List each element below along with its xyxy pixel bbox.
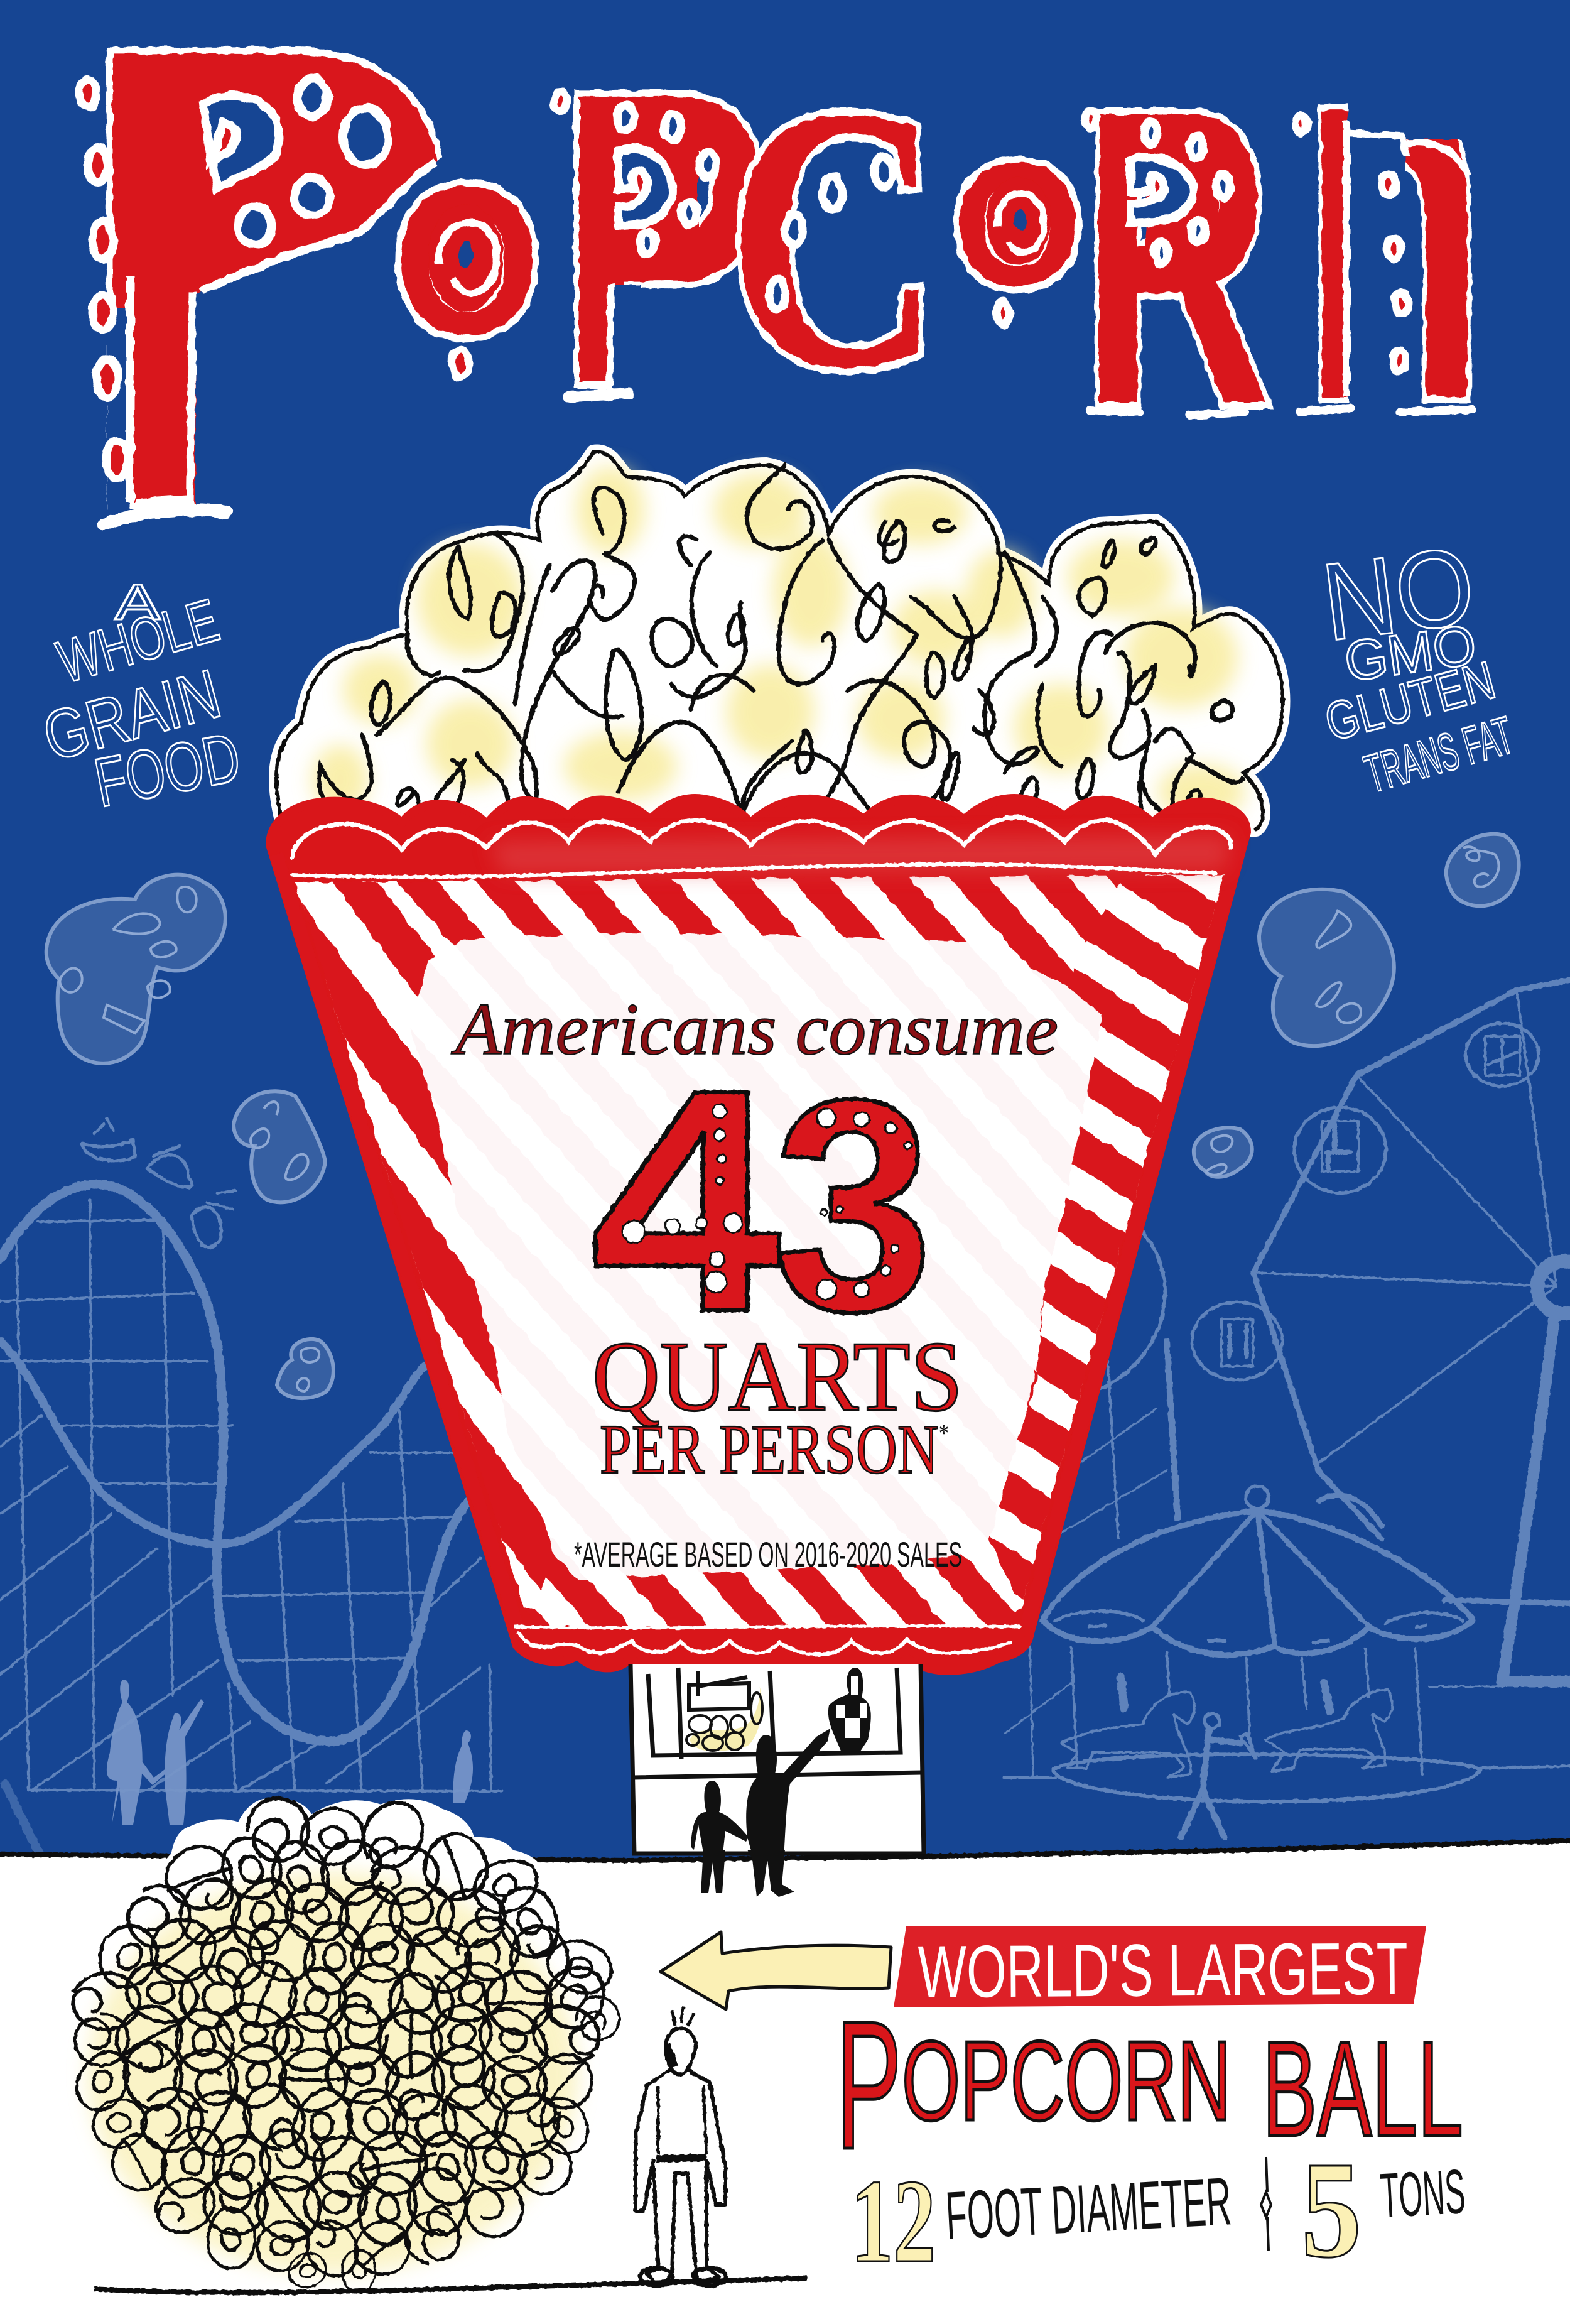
bucket number: 43: 4 (590, 1024, 783, 1378)
text block: no GMO gluten trans fat: GLUTEN (1319, 650, 1502, 752)
text block: a whole grain food: GRAIN (35, 655, 229, 776)
bucket body (270, 798, 1247, 1673)
text block: no GMO gluten trans fat: NO (1316, 524, 1481, 665)
child customer silhouette (691, 1781, 749, 1893)
popcorn silhouette (276, 452, 1282, 829)
background: ghost popcorn kernels (46, 834, 1519, 1398)
letter C: C (727, 28, 941, 446)
bucket text: per person: PER PERSON (600, 1411, 1016, 1489)
red side edges over the stripes (276, 842, 1240, 1639)
stat: 12 foot diameter (851, 2156, 1233, 2288)
ball ink loops (65, 1790, 624, 2294)
stat: 12 foot diameter: 12 (851, 2156, 936, 2288)
heading: popcorn ball: OPCORN (902, 2018, 1232, 2144)
booth counter and window (633, 1668, 922, 1778)
title dots and rivets (79, 79, 1473, 524)
top band wash (490, 835, 1231, 873)
stat: 5 tons (1301, 2133, 1467, 2286)
background: ferris wheel (1192, 980, 1570, 1686)
background: carousel (1005, 1486, 1570, 1837)
bucket text: per person: * (939, 1419, 949, 1447)
popcorn heap (276, 452, 1282, 829)
striped side panel (295, 874, 1225, 1627)
ball yellow body (88, 1872, 578, 2274)
text block: no GMO gluten trans fat: GMO (1341, 614, 1480, 694)
bucket rim lines (292, 817, 1231, 1654)
bucket number: 43 (590, 1024, 933, 1378)
background: roller coaster (0, 1118, 1178, 1852)
bucket footnote: *AVERAGE BASED ON 2016-2020 SALES (574, 1534, 962, 1574)
heading: popcorn ball: P (836, 1984, 902, 2187)
adult customer silhouette (746, 1729, 830, 1897)
rivets on the number (622, 1104, 912, 1300)
heading: popcorn ball (836, 1984, 1463, 2187)
bucket text: Americans consume: Americans consume (451, 988, 1058, 1070)
letter P second: P (558, 7, 771, 470)
bucket number: 43: 3 (774, 1037, 933, 1374)
popcorn bucket (270, 798, 1247, 1673)
divider between stats (1261, 2157, 1271, 2251)
bucket text: quarts: QUARTS (592, 1320, 963, 1432)
booth figures legs over the ground (701, 1850, 794, 1897)
background: ghost kernel curls (60, 847, 1499, 1391)
text block: a whole grain food: FOOD (89, 719, 246, 822)
text block: a whole grain food: A (115, 574, 161, 630)
ground line (0, 1840, 1570, 2324)
vendor (828, 1668, 871, 1752)
letter R: R (1081, 24, 1272, 491)
text block: a whole grain food: WHOLE (50, 587, 226, 696)
title: POPCORN (74, 0, 1486, 641)
text block: no GMO gluten trans fat (1316, 524, 1520, 803)
letter O: O (394, 143, 541, 377)
booth wall (631, 1664, 924, 1854)
arrow pointing at the ball (661, 1932, 891, 2009)
letter O second: O (953, 128, 1082, 322)
stat: 12 foot diameter: FOOT DIAMETER (944, 2163, 1233, 2254)
world's largest popcorn ball (65, 1790, 624, 2294)
popcorn ink loops (276, 452, 1282, 829)
text block: a whole grain food (35, 574, 246, 822)
poster: TONS (1378, 2156, 1467, 2231)
popcorn machine (686, 1671, 762, 1751)
stat: 5 tons: 5 (1301, 2133, 1362, 2286)
standing man for scale (636, 2007, 726, 2286)
ball silhouette (80, 1803, 621, 2290)
butter yellow patches (312, 466, 1245, 820)
concession booth (631, 1664, 924, 1897)
white centre panel (408, 933, 1102, 1580)
ball ground line (94, 2278, 807, 2293)
background: people at the coaster (107, 1680, 473, 1825)
